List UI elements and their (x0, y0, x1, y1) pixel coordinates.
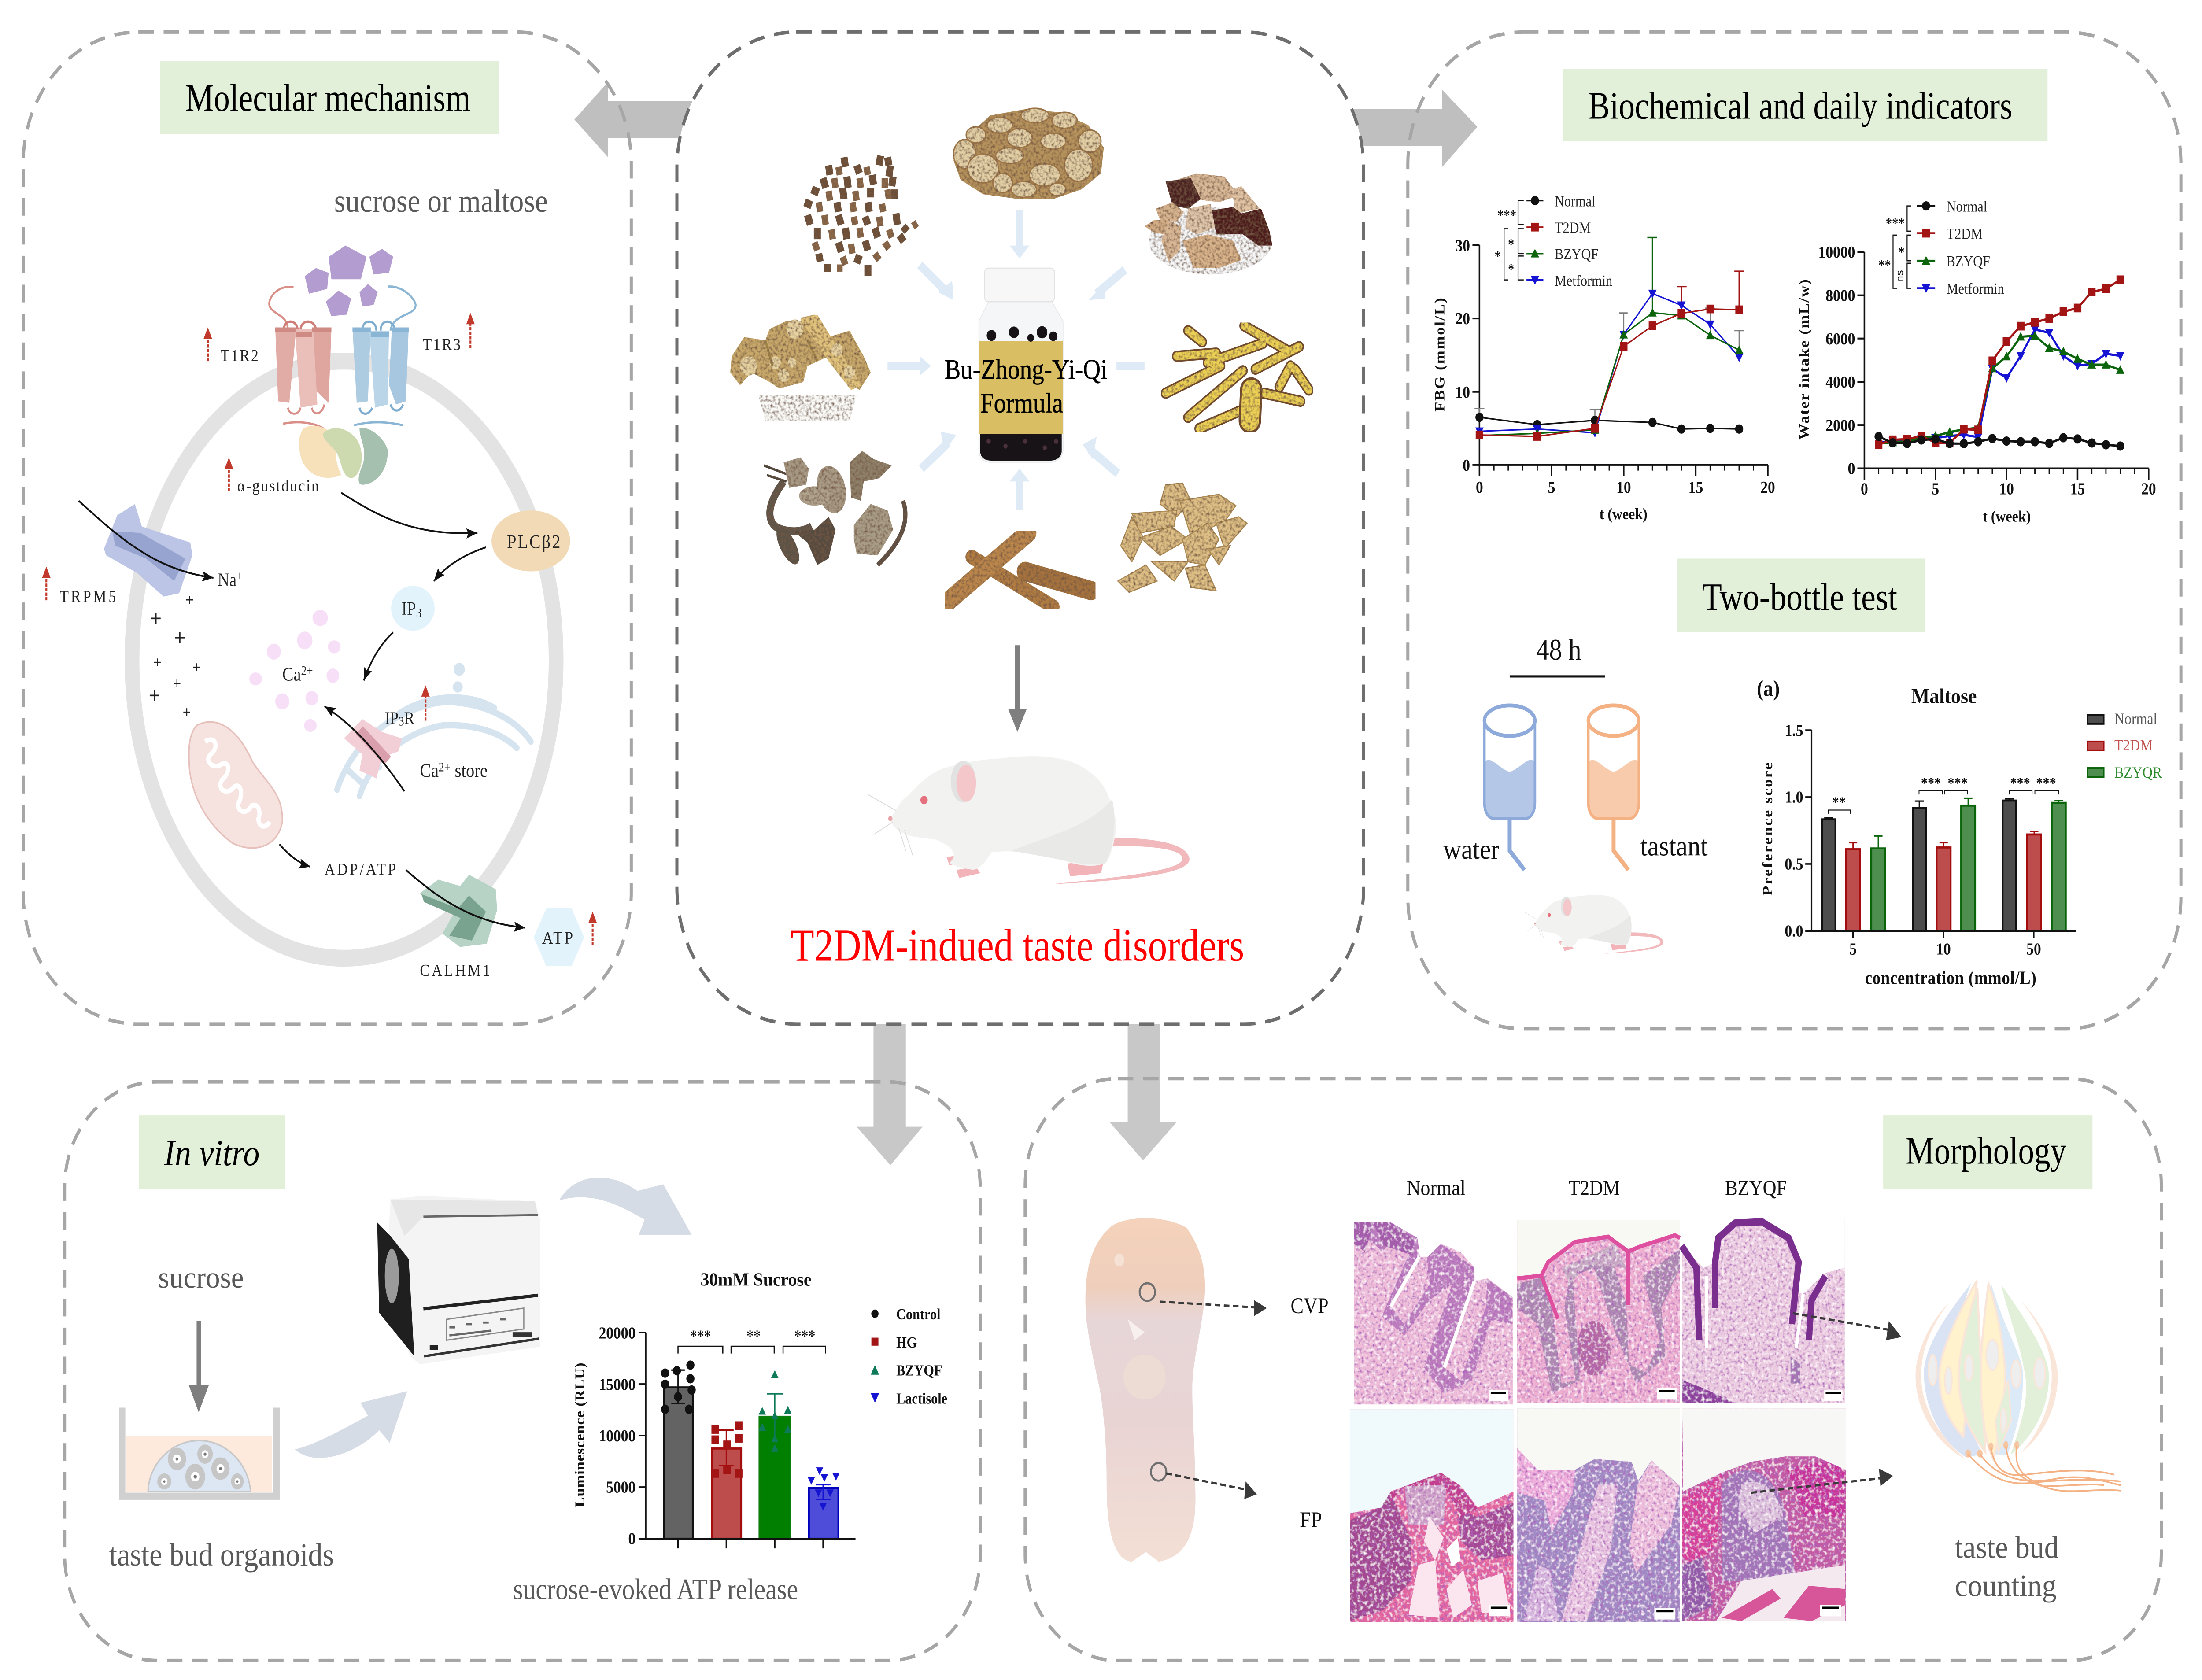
water intake axis labels: 0 (1848, 459, 1855, 478)
herb: shells on plate (1145, 174, 1272, 274)
water intake axis labels: 5 (1932, 480, 1939, 498)
maltose axis labels: 50 (2026, 939, 2041, 958)
chart: ATP release (573, 1269, 947, 1548)
label: Na+: Na (218, 569, 236, 590)
water intake axis labels (1796, 243, 2156, 525)
maltose significance: *** (2010, 775, 2030, 792)
sugar molecules (305, 246, 393, 316)
water intake axis labels: 10 (1999, 480, 2014, 498)
label: taste bud counting: taste bud (1955, 1531, 2059, 1565)
label: alpha-gustducin: α-gustducin (237, 476, 319, 495)
arrow: PLC to IP3 (434, 547, 486, 581)
FBG significance: *** (1497, 207, 1516, 223)
panel: Bu-Zhong-Yi-Qi formula (677, 32, 1363, 1024)
label: sucrose: sucrose (158, 1261, 244, 1295)
FBG significance: * (1495, 248, 1501, 264)
formula name: Bu-Zhong-Yi-Qi (944, 354, 1107, 385)
histology: CVP T2DM (1517, 1220, 1680, 1403)
column labels: Normal (1407, 1176, 1466, 1200)
dashed arrow: tongue to CVP (1160, 1300, 1267, 1316)
maltose axis labels: 10 (1936, 939, 1951, 958)
arrow: sucrose to dish (189, 1321, 209, 1412)
node: ATP with up arrow: ATP (542, 928, 573, 948)
heading: in vitro (139, 1115, 285, 1189)
node: ATP with up arrow (534, 908, 597, 966)
FBG legend: Metformin (1555, 273, 1612, 289)
water series: Normal (1879, 436, 2120, 446)
dashed arrow: tongue to FP (1166, 1473, 1257, 1499)
label: Ca2+: 2+ (301, 664, 313, 678)
histology: FP BZYQF (1682, 1408, 1846, 1621)
positive charges: + (149, 683, 160, 708)
maltose axis labels: Preference score (1760, 763, 1776, 896)
FBG series: Metformin (1479, 294, 1739, 433)
FBG significance: * (1508, 236, 1514, 252)
maltose significance: *** (1921, 775, 1941, 792)
maltose axis labels: concentration (mmol/L) (1865, 967, 2036, 988)
positive charges: + (153, 654, 161, 672)
herb: yellow slices (1166, 326, 1309, 428)
label: panel (a): (a) (1757, 676, 1780, 701)
maltose legend: Normal (2114, 710, 2157, 727)
positive charges (149, 591, 201, 721)
chart: maltose preference (1760, 684, 2162, 988)
label: tastant: tastant (1640, 831, 1708, 862)
arrow: ADP/ATP to ATP (406, 870, 525, 928)
maltose significance (1829, 775, 2059, 814)
label: Na+: + (236, 569, 243, 583)
maltose legend (2087, 710, 2162, 781)
maltose axis labels: 1.5 (1785, 721, 1803, 740)
mitochondrion (189, 722, 282, 848)
arrow: formula to rat (1009, 645, 1027, 732)
luminometer instrument (377, 1196, 540, 1364)
FBG axis labels: FBG (mmol/L) (1432, 298, 1448, 412)
label: Ca2+ store: Ca (420, 760, 439, 781)
heading: two-bottle test (1677, 558, 1925, 632)
ATP significance: *** (690, 1327, 711, 1345)
channel: TRPM5 (104, 504, 192, 597)
label: taste bud organoids: taste bud organoids (109, 1537, 334, 1573)
FBG error bars (1474, 295, 1744, 421)
FBG legend (1526, 193, 1612, 289)
dashed arrow: histology to taste bud lower (1751, 1469, 1893, 1493)
water intake significance: *** (1886, 215, 1905, 231)
heading: morphology: Morphology (1906, 1130, 2066, 1172)
water intake legend: Normal (1947, 199, 1987, 215)
label: sucrose-evoked ATP release: sucrose-evoked ATP release (513, 1573, 798, 1606)
arrow: center to molecular mechanism (574, 82, 695, 157)
dashed arrow: histology to taste bud upper (1793, 1313, 1902, 1340)
ATP significance: *** (794, 1327, 815, 1345)
FBG axis labels: 5 (1548, 478, 1555, 496)
calcium dots (249, 610, 340, 732)
FBG series: T2DM (1479, 309, 1739, 436)
maltose significance: ** (1833, 794, 1846, 811)
positive charges: + (183, 703, 191, 721)
arrow: IP3 to Ca (364, 632, 393, 680)
chart: water intake (1796, 199, 2156, 525)
chart title: maltose: Maltose (1911, 684, 1977, 708)
ATP axis labels: 20000 (599, 1324, 635, 1342)
heading: molecular mechanism (160, 61, 499, 134)
water intake significance: * (1898, 244, 1905, 260)
herb: brown chips (805, 156, 917, 276)
label: taste bud counting: counting (1955, 1569, 2057, 1603)
heading: biochemical and daily indicators (1563, 69, 2047, 141)
water intake legend: Metformin (1947, 281, 2004, 298)
arrow: center to in vitro (857, 1011, 923, 1165)
water intake axis labels: 20 (2141, 480, 2156, 498)
chart title: 30mM sucrose: 30mM Sucrose (701, 1269, 811, 1290)
label: 48 h: 48 h (1537, 633, 1581, 666)
histology: CVP BZYQF (1682, 1218, 1845, 1403)
label: TRPM5 with up arrow: TRPM5 (60, 587, 116, 606)
node: PLCb2 (491, 510, 570, 572)
FBG legend: Normal (1555, 193, 1595, 210)
positive charges: + (174, 626, 185, 650)
label: alpha-gustducin (225, 458, 319, 495)
ATP axis labels: 5000 (606, 1478, 635, 1496)
positive charges: + (192, 658, 201, 676)
FBG axis labels: 0 (1463, 456, 1470, 475)
arrow: TRPM5 sodium (79, 501, 214, 578)
herb: tan root slices (953, 108, 1104, 199)
label: FP: FP (1300, 1507, 1322, 1532)
curved arrow to luminometer (295, 1391, 407, 1458)
data points (665, 1365, 836, 1506)
FBG series: BZYQF (1479, 313, 1739, 436)
FBG axis labels: 0 (1476, 478, 1483, 496)
formula name: Formula (980, 388, 1063, 419)
label: CALHM1: CALHM1 (420, 961, 490, 980)
arrow: center to morphology (1109, 1011, 1177, 1160)
FBG axis labels: 20 (1456, 309, 1470, 328)
water intake axis labels: 0 (1861, 480, 1868, 498)
heading: morphology (1883, 1115, 2092, 1189)
heading: biochemical and daily indicators: Biochemical and daily indicators (1589, 85, 2013, 127)
herb: ginseng roots (730, 314, 871, 421)
water intake legend (1917, 199, 2004, 298)
title: T2DM taste disorders: T2DM-indued taste disorders (791, 920, 1244, 971)
flow arrows to bottle (887, 210, 1145, 510)
FBG axis labels (1432, 236, 1775, 523)
herb: tan flakes (1118, 483, 1247, 592)
positive charges: + (185, 591, 194, 609)
node: IP3: IP (402, 598, 416, 619)
label: IP3R with up arrow: IP (385, 709, 399, 728)
heading: molecular mechanism: Molecular mechanism (185, 77, 470, 119)
water series: Metformin (1879, 329, 2120, 443)
label: CVP: CVP (1290, 1293, 1329, 1318)
water bottle (1485, 705, 1535, 870)
water intake axis labels: 6000 (1825, 329, 1855, 348)
tastant bottle (1589, 705, 1639, 870)
ATP axis labels: 0 (628, 1529, 635, 1548)
ATP legend: BZYQF (896, 1362, 942, 1379)
FBG axis labels: 10 (1456, 383, 1470, 401)
maltose significance: *** (1947, 775, 1968, 792)
flow arrowheads (920, 246, 1105, 481)
water intake axis labels: Water intake (mL/w) (1796, 279, 1812, 440)
label: Ca2+ store: store (451, 760, 488, 781)
column labels (1407, 1176, 1787, 1200)
maltose axis labels: 1.0 (1785, 787, 1803, 806)
ATP legend: Control (896, 1306, 940, 1323)
label: Ca2+: Ca (282, 663, 301, 685)
water intake axis labels: t (week) (1983, 508, 2031, 525)
FBG axis labels: 30 (1456, 236, 1470, 255)
ATP legend: HG (896, 1334, 917, 1351)
ATP significance: ** (746, 1327, 761, 1345)
water intake axis labels: 10000 (1818, 243, 1855, 262)
histology: FP normal (1350, 1409, 1514, 1622)
arrow: IP3R release (325, 706, 404, 791)
water intake legend: T2DM (1947, 226, 1983, 243)
positive charges: + (173, 675, 181, 692)
maltose legend: BZYQR (2114, 764, 2162, 781)
histology: CVP normal (1354, 1222, 1513, 1404)
arrow: mitochondrion to ADP/ATP (280, 844, 310, 867)
water series: T2DM (1879, 280, 2120, 445)
channel: IP3R (344, 719, 402, 779)
water intake axis labels: 2000 (1825, 416, 1855, 435)
ATP legend (871, 1306, 947, 1407)
label: taste bud counting (1955, 1531, 2059, 1603)
rat (868, 756, 1190, 884)
water intake significance: ** (1878, 257, 1891, 273)
label: TRPM5 with up arrow (42, 567, 116, 606)
heading: two-bottle test: Two-bottle test (1702, 576, 1897, 618)
FBG axis labels: t (week) (1600, 505, 1648, 523)
label: water: water (1443, 834, 1499, 865)
tongue specimen (1086, 1218, 1205, 1562)
label: T1R2 with up arrow (203, 328, 259, 365)
endoplasmic reticulum (337, 666, 531, 796)
water intake significance (1878, 206, 1911, 288)
FBG significance: * (1508, 261, 1514, 277)
panel: in vitro (65, 1082, 980, 1661)
small rat (1525, 895, 1663, 954)
maltose axis labels: 0.5 (1785, 855, 1803, 873)
ATP axis labels: Luminescence (RLU) (573, 1362, 587, 1507)
maltose axis labels: 5 (1849, 939, 1857, 958)
node: IP3 (391, 586, 435, 631)
heading: in vitro: In vitro (164, 1133, 259, 1174)
water intake significance: ns (1894, 270, 1905, 282)
FBG axis labels: 15 (1688, 478, 1703, 496)
column labels: BZYQF (1725, 1176, 1787, 1200)
bottle (979, 268, 1063, 462)
maltose axis labels (1760, 721, 2041, 988)
channel: CALHM1 (420, 875, 497, 947)
formula name (944, 354, 1107, 419)
maltose legend: T2DM (2114, 736, 2153, 754)
label: sucrose or maltose: sucrose or maltose (334, 183, 548, 219)
label: Ca2+ store: 2+ (439, 760, 451, 774)
water intake axis labels: 8000 (1825, 286, 1855, 305)
label: T1R3 with up arrow: T1R3 (423, 335, 461, 354)
FBG series: Normal (1479, 417, 1739, 429)
water intake axis labels: 15 (2070, 480, 2085, 498)
column labels: T2DM (1569, 1176, 1620, 1200)
cell membrane (132, 361, 556, 958)
node: IP3: 3 (416, 606, 421, 620)
panel: morphology (1025, 1078, 2161, 1661)
label: ADP/ATP: ADP/ATP (325, 860, 396, 879)
panel: molecular mechanism (23, 32, 631, 1024)
taste bud illustration (1915, 1281, 2121, 1491)
ATP significance (678, 1327, 825, 1354)
G protein complex (299, 426, 388, 485)
label: T1R2 with up arrow: T1R2 (221, 346, 259, 365)
maltose significance: *** (2036, 775, 2056, 792)
herb: dark roots (764, 451, 905, 568)
water intake axis labels: 4000 (1825, 373, 1855, 391)
FBG significance (1495, 201, 1524, 280)
FBG axis labels: 20 (1760, 478, 1775, 496)
maltose axis labels: 0.0 (1785, 922, 1803, 940)
label: IP3R with up arrow: R (404, 709, 415, 728)
FBG legend: BZYQF (1555, 246, 1598, 263)
water intake legend: BZYQF (1947, 253, 1990, 270)
histology: FP T2DM (1517, 1408, 1680, 1622)
ATP legend: Lactisole (896, 1391, 947, 1407)
receptor: T1R3 (352, 287, 416, 425)
arrow: center to biochemical indicators (1348, 90, 1478, 167)
arrow: gustducin to PLC (341, 493, 477, 533)
culture dish with organoids (122, 1407, 277, 1496)
chart: FBG (1432, 193, 1775, 523)
receptor: T1R2 (269, 287, 332, 433)
label: T1R3 with up arrow (423, 313, 475, 354)
panel: biochemical indicators and two-bottle test (1408, 32, 2181, 1029)
label: IP3R with up arrow (385, 685, 430, 728)
FBG legend: T2DM (1555, 220, 1591, 236)
water series: BZYQF (1879, 336, 2120, 443)
label: IP3R with up arrow: 3 (399, 714, 404, 728)
FBG axis labels: 10 (1616, 478, 1631, 496)
node: PLCb2: PLCβ2 (507, 531, 560, 552)
ATP axis labels: 15000 (599, 1375, 635, 1394)
ATP axis labels: 10000 (599, 1426, 635, 1445)
herb: brown root sticks (950, 533, 1091, 607)
curved arrow to ATP chart (559, 1178, 691, 1235)
ATP axis labels (573, 1324, 635, 1548)
positive charges: + (150, 606, 162, 631)
